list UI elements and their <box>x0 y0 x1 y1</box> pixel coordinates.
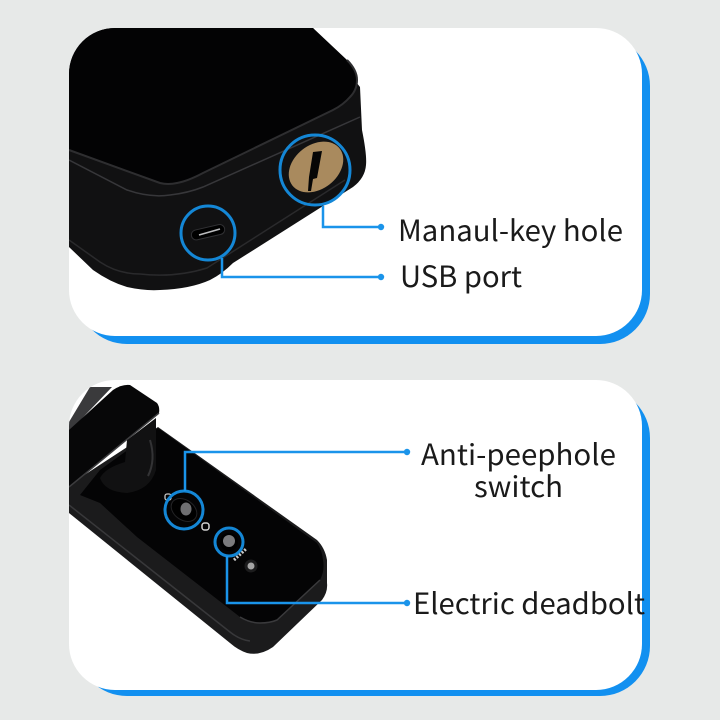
infographic canvas <box>69 28 650 696</box>
plate inner face <box>80 428 324 623</box>
panel: bottom <box>69 380 650 696</box>
label: electric deadbolt: Electric deadbolt <box>413 581 645 623</box>
label: anti-peephole switch <box>421 432 616 506</box>
icon: USB port <box>181 206 235 260</box>
leader line: anti-peephole switch <box>185 449 410 491</box>
lock body: top view <box>69 28 366 290</box>
leader line: USB port <box>222 258 384 280</box>
lever <box>69 385 159 487</box>
label: anti-peephole switch: switch <box>474 464 563 506</box>
neck and rosette <box>100 418 156 493</box>
label: anti-peephole switch: Anti-peephole <box>421 432 616 474</box>
label: USB port: USB port <box>400 254 522 296</box>
leader line: manual key hole <box>323 206 384 230</box>
icon: electric deadbolt button <box>215 528 258 572</box>
icon: key cylinder <box>279 131 353 205</box>
label: manual key hole: Manaul-key hole <box>398 208 623 250</box>
handle rear wedge <box>69 387 112 432</box>
icon: anti-peephole switch <box>165 491 209 530</box>
plate outer <box>69 427 327 654</box>
leader line: electric deadbolt <box>227 556 410 606</box>
panel: top <box>69 28 650 344</box>
lock back plate and handle <box>69 385 327 654</box>
